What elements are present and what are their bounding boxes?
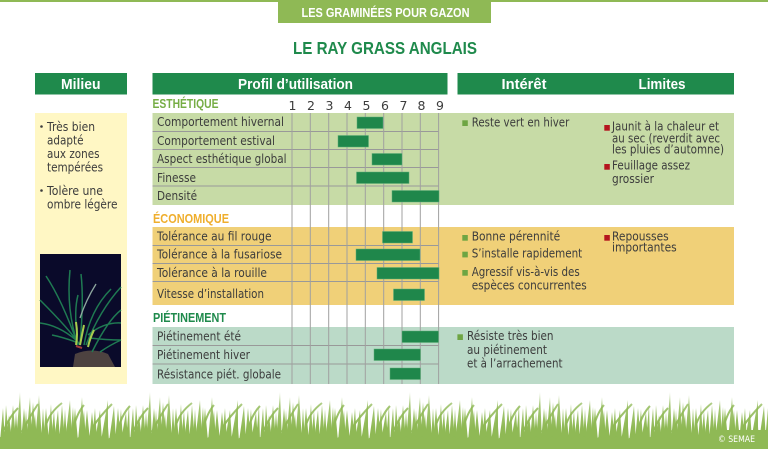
row labels: esthétique: Aspect esthétique global <box>157 152 286 166</box>
milieu text: adapté <box>47 134 84 148</box>
milieu text: ombre légère <box>47 198 118 212</box>
row labels: piétinement: Piétinement hiver <box>157 348 250 362</box>
column header: Intérêt and Limites: Intérêt <box>502 76 547 93</box>
intérêt: piétinement: Résiste très bien <box>467 329 554 343</box>
column header: Milieu <box>35 73 127 94</box>
milieu text: Très bien <box>46 120 95 134</box>
milieu text: aux zones <box>47 147 100 161</box>
milieu text: Tolère une <box>46 184 103 198</box>
limites: esthétique: Jaunit à la chaleur et <box>611 120 719 134</box>
scale numbers: 2 <box>307 98 315 113</box>
row labels: esthétique <box>157 115 286 203</box>
row labels: piétinement: Piétinement été <box>157 330 241 344</box>
section heading: piétinement: PIÉTINEMENT <box>153 310 226 325</box>
header tab <box>278 2 491 23</box>
grass footer <box>0 392 768 449</box>
row labels: piétinement <box>157 330 281 381</box>
limites: esthétique: Feuillage assez <box>612 158 690 172</box>
limites: esthétique: au sec (reverdit avec <box>612 131 720 145</box>
scale numbers: 1 <box>289 98 296 113</box>
limites: économique <box>604 230 677 255</box>
title: LE RAY GRASS ANGLAIS <box>293 38 477 58</box>
bars: piétinement <box>374 331 438 380</box>
panel: économique band <box>152 227 734 305</box>
scale numbers: 8 <box>418 98 426 113</box>
section heading: économique: ÉCONOMIQUE <box>153 211 229 226</box>
scale numbers: 3 <box>326 98 333 113</box>
row labels: économique <box>156 230 282 301</box>
row labels: économique: Tolérance au fil rouge <box>156 230 272 244</box>
plant photo <box>40 254 121 367</box>
row labels: économique: Vitesse d’installation <box>157 287 264 301</box>
panel: piétinement band <box>152 327 734 384</box>
scale numbers: 7 <box>400 98 407 113</box>
limites: économique: Repousses <box>612 230 669 244</box>
section heading: esthétique: ESTHÉTIQUE <box>152 96 218 111</box>
bars: esthétique <box>338 117 439 202</box>
column header: Milieu: Milieu <box>61 76 100 93</box>
intérêt: économique: Bonne pérennité <box>472 230 560 244</box>
intérêt: économique: espèces concurrentes <box>472 278 587 292</box>
scale numbers: 9 <box>436 98 444 113</box>
scale numbers <box>289 98 444 113</box>
limites: esthétique: grossier <box>612 172 654 186</box>
intérêt: piétinement: au piétinement <box>467 343 547 357</box>
row labels: esthétique: Comportement hivernal <box>157 115 284 129</box>
column header: Profil d'utilisation: Profil d’utilisation <box>238 76 353 93</box>
milieu text: tempérées <box>47 160 103 174</box>
row labels: esthétique: Comportement estival <box>157 134 275 148</box>
row labels: esthétique: Densité <box>157 189 197 203</box>
row labels: piétinement: Résistance piét. globale <box>157 367 281 381</box>
limites: esthétique <box>604 120 724 186</box>
intérêt: économique <box>462 230 587 292</box>
column header: Intérêt and Limites <box>458 73 734 94</box>
limites: économique: importantes <box>612 241 677 255</box>
panel: esthétique band <box>152 113 734 205</box>
column header: Profil d'utilisation <box>152 73 448 94</box>
intérêt: économique: Agressif vis-à-vis des <box>472 265 580 279</box>
copyright <box>710 430 768 449</box>
intérêt: économique: S’installe rapidement <box>472 247 582 261</box>
limites: esthétique: les pluies d’automne) <box>612 142 724 156</box>
milieu text <box>40 120 118 212</box>
copyright: © SEMAE <box>718 435 755 445</box>
row labels: économique: Tolérance à la rouille <box>156 266 267 280</box>
row labels: esthétique: Finesse <box>157 171 196 185</box>
intérêt: piétinement <box>457 329 563 370</box>
scale numbers: 4 <box>344 98 352 113</box>
panel: milieu <box>35 113 127 384</box>
header tab: LES GRAMINÉES POUR GAZON <box>302 5 470 20</box>
row labels: économique: Tolérance à la fusariose <box>156 248 282 262</box>
intérêt: piétinement: et à l’arrachement <box>467 356 563 370</box>
column header: Intérêt and Limites: Limites <box>638 76 686 93</box>
scale numbers: 6 <box>381 98 389 113</box>
intérêt: esthétique: Reste vert en hiver <box>472 116 569 130</box>
bars: économique <box>356 232 439 300</box>
scale numbers: 5 <box>363 98 370 113</box>
top bar <box>0 0 768 2</box>
